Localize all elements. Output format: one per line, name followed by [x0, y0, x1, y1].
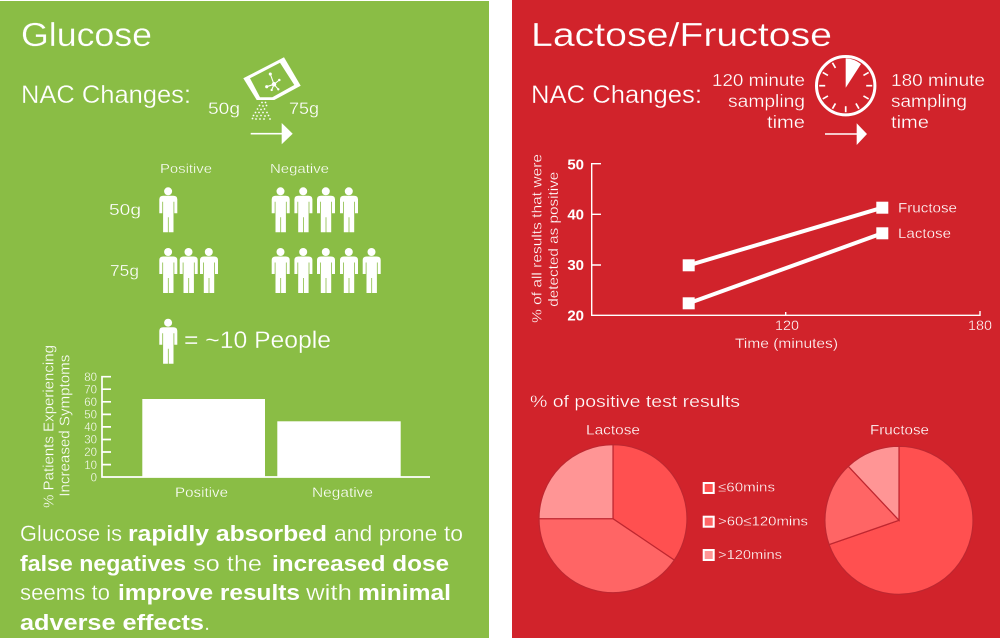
line chart: positive results by sampling time	[529, 154, 992, 351]
y axis tick labels: 80	[84, 372, 97, 384]
text block: glucose conclusion: adverse effects	[20, 610, 204, 635]
bar: negative	[277, 421, 401, 478]
text block: glucose conclusion: improve results	[118, 580, 300, 605]
y axis tick labels: 30	[567, 257, 584, 274]
y axis tick labels: 50	[567, 156, 584, 174]
text block: glucose conclusion: .	[204, 610, 210, 635]
bar label: Negative: Negative	[312, 485, 373, 500]
text: 180 minute sampling time: time	[891, 112, 929, 132]
text block: glucose conclusion: rapidly absorbed	[128, 521, 327, 546]
y axis title: detected as positive	[545, 171, 561, 307]
heading: % of positive test results: % of positive test results	[530, 392, 740, 411]
y axis title: Increased Symptoms	[56, 355, 73, 497]
people row: 75g	[159, 248, 381, 293]
panel: lactose/fructose	[512, 0, 1000, 638]
x axis tick labels: 120	[775, 318, 799, 333]
pie chart: lactose	[539, 422, 687, 593]
y axis title: % of all results that were	[529, 154, 545, 323]
heading: Glucose: Glucose	[21, 16, 152, 53]
legend: >60≤120mins	[718, 513, 809, 528]
y axis tick labels: 20	[567, 308, 584, 324]
pie chart: lactose: Lactose	[586, 422, 640, 438]
y axis tick labels: 70	[84, 384, 97, 396]
bar: positive	[142, 399, 265, 478]
legend	[704, 480, 809, 562]
axes	[592, 164, 980, 315]
pie chart: fructose	[825, 422, 973, 594]
y axis tick labels: 60	[84, 397, 97, 409]
series: lactose	[683, 226, 951, 309]
panel: glucose	[0, 1, 489, 638]
row label: 75g: 75g	[110, 263, 139, 280]
y axis title	[40, 345, 73, 508]
series: fructose: Fructose	[898, 200, 957, 216]
text block: glucose conclusion: increased dose	[272, 551, 449, 576]
y axis title	[529, 154, 561, 323]
y axis tick labels: 40	[84, 422, 97, 434]
people row: 50g	[159, 187, 358, 232]
y axis title: % Patients Experiencing	[40, 345, 57, 508]
label: 75g: 75g	[289, 99, 319, 118]
text block: glucose conclusion: Glucose is	[20, 521, 122, 546]
x axis title: Time (minutes)	[735, 335, 838, 351]
label: 50g: 50g	[208, 99, 240, 118]
pictogram: positive and negative people by dose	[109, 161, 381, 293]
text: 120 minute sampling time: sampling	[728, 91, 805, 111]
arrow: dose increase	[251, 123, 293, 144]
text: 120 minute sampling time: 120 minute	[712, 70, 805, 90]
pictogram key: = ~10 People	[184, 327, 331, 354]
legend: ≤60mins	[718, 480, 776, 495]
text block: glucose conclusion: false negatives	[20, 551, 186, 576]
column label: Negative: Negative	[270, 161, 329, 176]
y axis tick labels	[84, 372, 97, 484]
y axis tick labels: 20	[84, 447, 97, 459]
text: 180 minute sampling time: sampling	[891, 91, 967, 111]
text: 120 minute sampling time: time	[767, 112, 805, 132]
pictogram key	[159, 319, 331, 364]
heading: NAC Changes: NAC Changes:	[531, 81, 702, 109]
pie chart: fructose: Fructose	[870, 422, 929, 438]
axes	[102, 377, 430, 477]
text: 120 minute sampling time	[712, 70, 805, 132]
y axis tick labels: 0	[91, 472, 97, 484]
series: lactose: Lactose	[898, 226, 951, 241]
line chart: positive results by sampling time: 180	[968, 318, 992, 333]
y axis tick labels	[567, 156, 584, 324]
y axis tick labels: 10	[84, 460, 97, 472]
text block: glucose conclusion: with	[305, 580, 352, 605]
arrow: sampling time increase	[825, 123, 867, 145]
text: 180 minute sampling time	[891, 70, 985, 132]
heading: Lactose/Fructose: Lactose/Fructose	[531, 16, 832, 53]
text block: glucose conclusion: so the	[193, 551, 262, 576]
bar chart: patients with increased symptoms	[40, 345, 430, 508]
y axis tick labels: 40	[567, 206, 584, 224]
text block: glucose conclusion: seems to	[20, 580, 110, 605]
text block: glucose conclusion: and prone to	[334, 521, 463, 546]
column label: Positive: Positive	[160, 161, 212, 176]
text block: glucose conclusion: minimal	[358, 580, 451, 605]
legend: >120mins	[718, 547, 783, 562]
icon: clock	[816, 56, 875, 115]
heading: NAC Changes: NAC Changes:	[21, 81, 191, 109]
y axis tick labels: 30	[84, 435, 97, 447]
row label: 50g: 50g	[109, 202, 141, 219]
text block: glucose conclusion	[20, 521, 463, 635]
icon: NAC sachet pouring	[243, 57, 301, 120]
bar label: Positive: Positive	[175, 485, 228, 500]
series: fructose	[683, 200, 957, 271]
text: 180 minute sampling time: 180 minute	[891, 70, 985, 90]
y axis tick labels: 50	[84, 410, 97, 422]
